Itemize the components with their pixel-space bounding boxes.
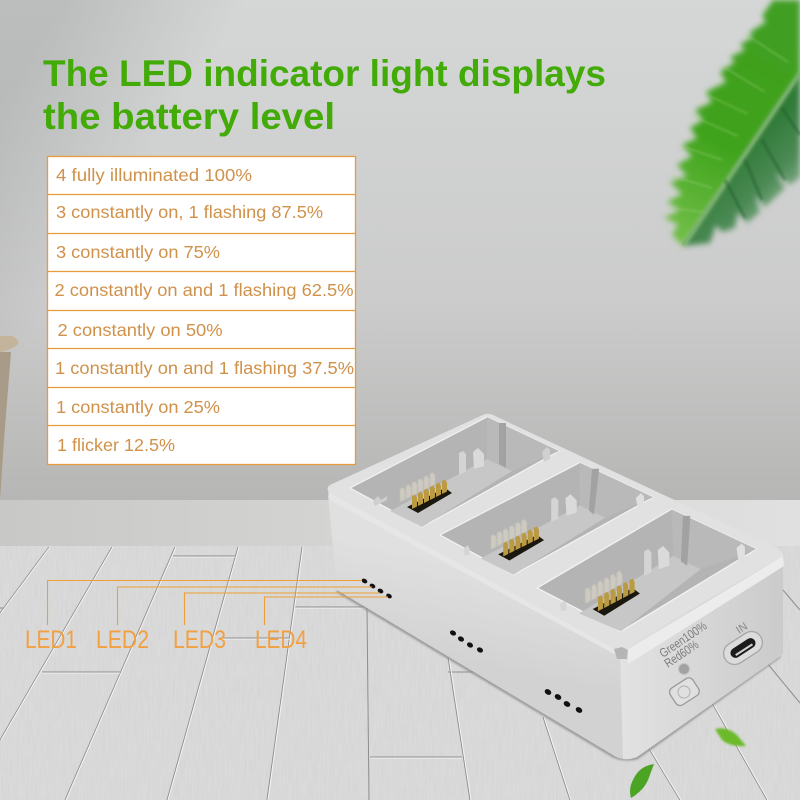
- USB-C port label: IN: [734, 620, 750, 637]
- title: the battery level: [43, 96, 335, 137]
- status label: Green100%: [657, 619, 709, 660]
- charging hub: [328, 414, 784, 759]
- slot 3: [537, 509, 756, 631]
- table: battery levels: 1 constantly on and 1 flashing 37.5%: [55, 358, 354, 378]
- icon: small blurred leaf: [715, 728, 746, 746]
- table: battery levels: 1 constantly on 25%: [56, 397, 220, 417]
- status LED: [678, 664, 690, 674]
- icon: small falling leaf: [630, 764, 654, 798]
- LED labels: LED3: [173, 626, 226, 654]
- left bevel: [328, 492, 618, 656]
- baseboard: [0, 500, 800, 546]
- LED callout lines: [48, 580, 388, 625]
- table: battery levels: 2 constantly on 50%: [58, 320, 222, 340]
- LED labels: [25, 626, 307, 654]
- corner chamfer: [614, 647, 628, 659]
- LED labels: LED1: [25, 626, 77, 654]
- title: The LED indicator light displays: [43, 53, 606, 94]
- hub contact shadow: [337, 591, 780, 759]
- power button: [668, 676, 701, 707]
- table: battery levels: 3 constantly on 75%: [56, 242, 220, 262]
- table: battery levels: 2 constantly on and 1 flashing 62.5%: [54, 280, 354, 300]
- LED holes: [361, 578, 583, 714]
- LED labels: LED2: [96, 626, 149, 654]
- title: [43, 53, 606, 137]
- icon: blurred palm leaf: [664, 0, 800, 246]
- USB-C port: [719, 627, 767, 669]
- side table leg: [0, 336, 18, 500]
- table: battery levels: 1 flicker 12.5%: [57, 435, 175, 455]
- background wall: [0, 0, 800, 500]
- front bevel: [627, 556, 784, 664]
- status label: Red60%: [662, 638, 701, 670]
- LED labels: LED4: [255, 626, 307, 654]
- status label: [657, 619, 709, 670]
- right side face: [620, 555, 783, 759]
- slot 2: [440, 463, 653, 575]
- table: battery levels: 4 fully illuminated 100%: [56, 165, 252, 185]
- table: battery levels: [47, 156, 356, 464]
- wooden floor: [0, 546, 800, 800]
- table: battery levels: 3 constantly on, 1 flashing 87.5%: [56, 202, 323, 222]
- top face: [328, 414, 783, 650]
- slot 1: [350, 417, 559, 527]
- left side face: [328, 495, 623, 759]
